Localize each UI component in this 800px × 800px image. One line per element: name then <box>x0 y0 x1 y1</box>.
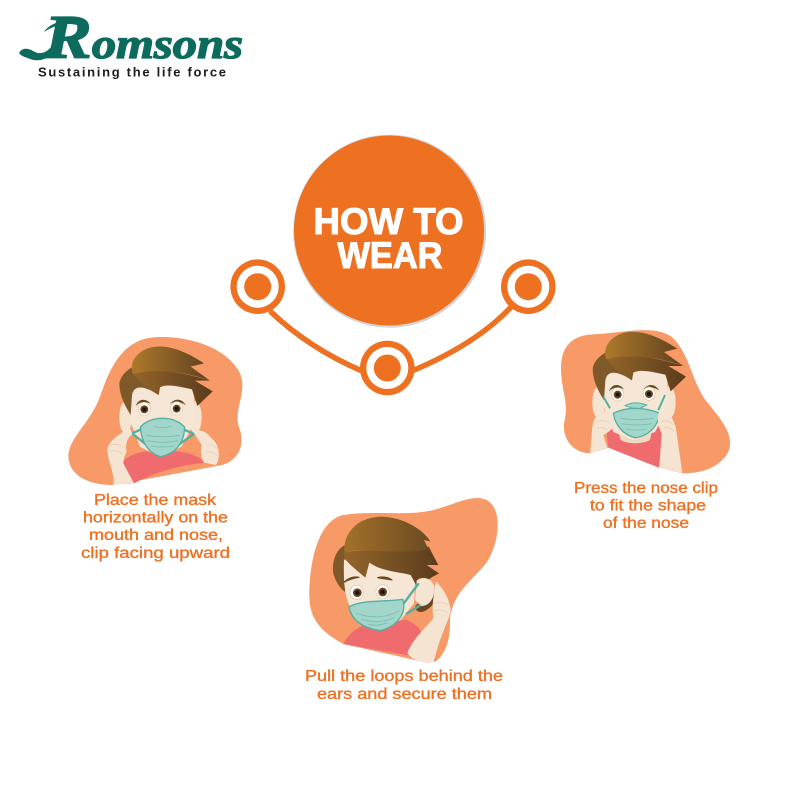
logo tagline: Sustaining the life force <box>38 65 226 80</box>
caption: step 1: horizontally on the <box>83 510 228 527</box>
node: right <box>501 259 556 314</box>
caption: step 1: Place the mask <box>94 492 216 509</box>
caption: step 1: clip facing upward <box>81 545 230 562</box>
connector arc: right <box>412 307 511 371</box>
caption: step 1 <box>81 492 230 562</box>
caption: step 3: Press the nose clip <box>574 480 718 497</box>
illustration: step 2 boy securing loops <box>309 498 498 663</box>
caption: step 3: to fit the shape <box>590 498 706 514</box>
illustration: step 3 boy pressing nose clip <box>561 330 730 473</box>
title text <box>314 201 464 276</box>
caption: step 2: ears and secure them <box>317 686 492 703</box>
node: left <box>230 259 285 314</box>
caption: step 2 <box>305 668 503 703</box>
caption: step 3: of the nose <box>603 515 689 532</box>
connector arc: left <box>270 311 362 371</box>
illustration: step 1 boy placing mask <box>68 337 242 485</box>
title text: WEAR <box>338 235 442 276</box>
node: middle <box>360 341 415 395</box>
title circle <box>293 135 486 328</box>
logo wordmark: Romsons <box>43 4 243 72</box>
caption: step 2: Pull the loops behind the <box>305 668 503 685</box>
title text: HOW TO <box>314 201 464 242</box>
caption: step 1: mouth and nose, <box>89 527 223 544</box>
caption: step 3 <box>574 480 718 532</box>
logo: Romsons <box>19 4 243 80</box>
